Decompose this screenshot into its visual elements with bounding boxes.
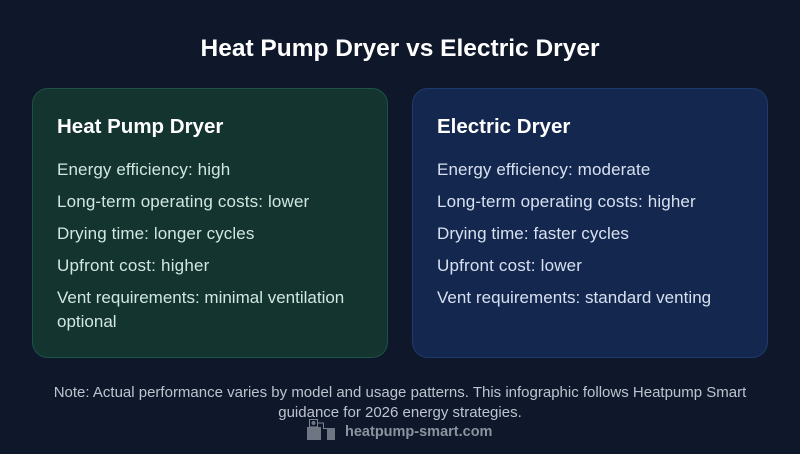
text: upfront cost: Upfront cost: lower bbox=[437, 256, 582, 274]
text: vent requirements: optional bbox=[57, 312, 117, 330]
panel: heat pump dryer bbox=[32, 88, 388, 358]
text: energy efficiency: Energy efficiency: moderate bbox=[437, 160, 650, 178]
text: operating costs: Long-term operating costs: lower bbox=[57, 192, 309, 210]
text: vent requirements bbox=[57, 288, 344, 330]
text: upfront cost: Upfront cost: higher bbox=[57, 256, 210, 274]
icon: heat pump logo bbox=[307, 419, 335, 440]
text: energy efficiency: Energy efficiency: high bbox=[57, 160, 230, 178]
footnote: guidance for 2026 energy strategies. bbox=[278, 404, 522, 420]
title: Heat Pump Dryer vs Electric Dryer bbox=[200, 35, 600, 62]
text: drying time: Drying time: longer cycles bbox=[57, 224, 254, 242]
text: operating costs: Long-term operating costs: higher bbox=[437, 192, 696, 210]
heading: electric dryer: Electric Dryer bbox=[437, 115, 570, 138]
text: vent requirements: Vent requirements: minimal ventilation bbox=[57, 288, 344, 306]
text: drying time: Drying time: faster cycles bbox=[437, 224, 629, 242]
text: vent requirements: Vent requirements: standard venting bbox=[437, 288, 711, 306]
panel: electric dryer bbox=[412, 88, 768, 358]
brand text: heatpump-smart.com bbox=[345, 424, 492, 440]
heading: heat pump dryer: Heat Pump Dryer bbox=[57, 115, 223, 138]
footnote bbox=[54, 384, 746, 420]
footnote: Note: Actual performance varies by model and usage patterns. This infographic follows Heatpump Smart bbox=[54, 384, 746, 400]
